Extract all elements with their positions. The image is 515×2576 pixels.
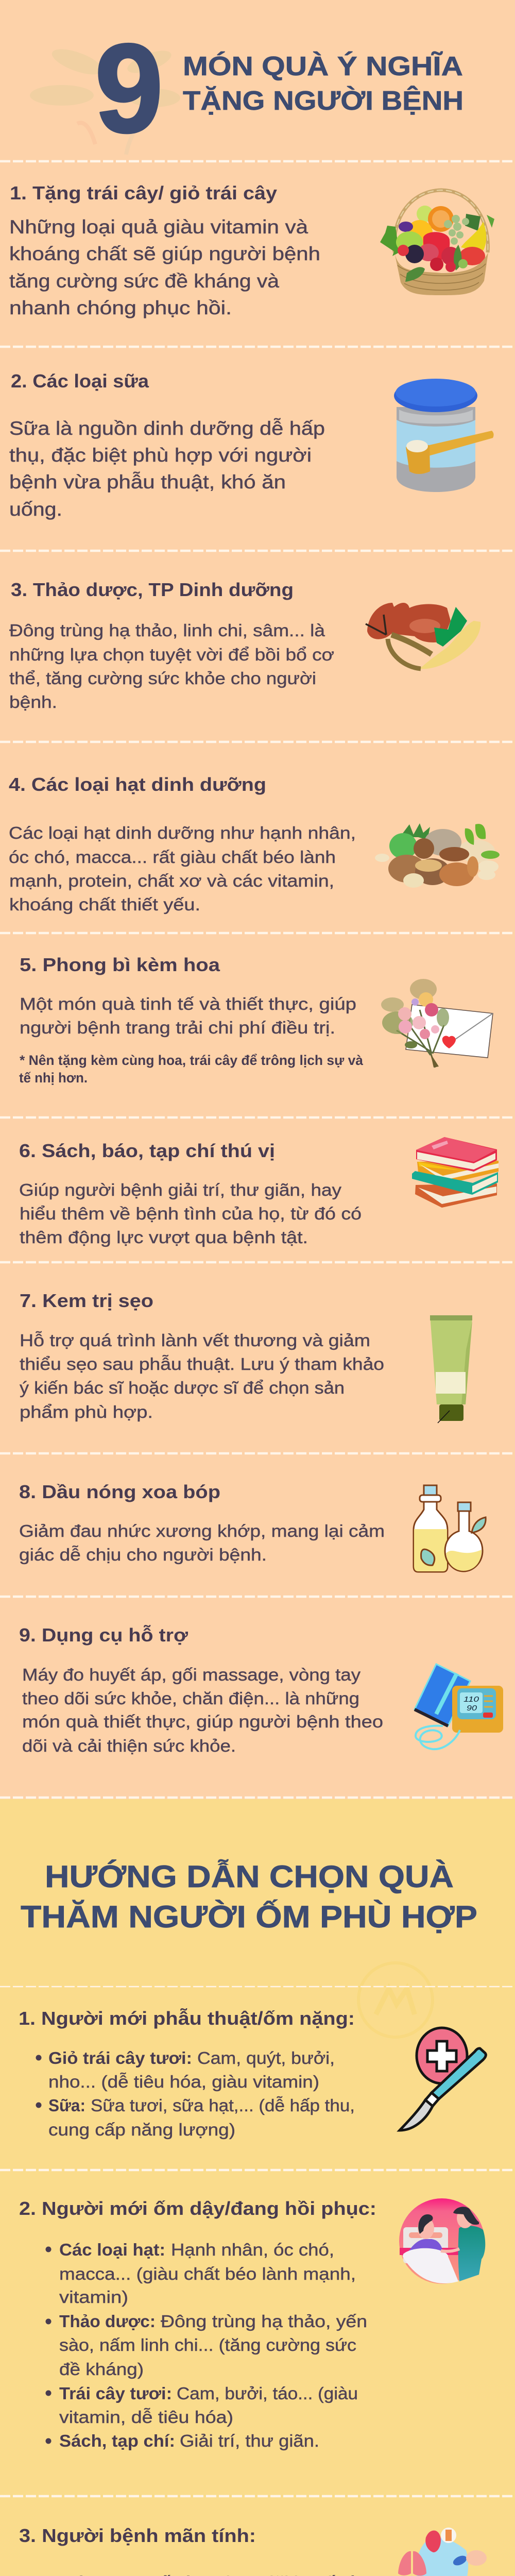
title block bbox=[95, 18, 464, 159]
list guide 2: Cam, bưởi, táo... (giàu bbox=[177, 2384, 358, 2403]
heading 5: 5. Phong bì kèm hoa bbox=[20, 954, 220, 975]
body 4: khoáng chất thiết yếu. bbox=[9, 895, 200, 914]
section title: guide bbox=[21, 1859, 477, 1934]
panel: guide 3 chronic bbox=[19, 2525, 487, 2576]
body 9: theo dõi sức khỏe, chăn điện... là những bbox=[22, 1689, 359, 1708]
icon: cream tube bbox=[430, 1315, 472, 1423]
body 3 bbox=[9, 621, 334, 711]
panel: item 9 support devices bbox=[19, 1624, 503, 1755]
body 6: thêm động lực vượt qua bệnh tật. bbox=[20, 1228, 308, 1247]
body 2 bbox=[9, 418, 325, 520]
body 1 bbox=[9, 216, 320, 318]
body 4: Các loại hạt dinh dưỡng như hạnh nhân, bbox=[9, 823, 356, 842]
panel: item 3 herbs bbox=[9, 579, 480, 711]
body 7 bbox=[20, 1331, 384, 1421]
body 3: Đông trùng hạ thảo, linh chi, sâm... là bbox=[9, 621, 325, 640]
list guide 1: Sữa: bbox=[48, 2096, 85, 2115]
list guide 2: đề kháng) bbox=[59, 2360, 144, 2379]
heading 2: 2. Các loại sữa bbox=[11, 370, 149, 392]
body 6: hiểu thêm về bệnh tình của họ, từ đó có bbox=[20, 1204, 362, 1223]
body 9 bbox=[22, 1665, 383, 1755]
list guide 2: macca... (giàu chất béo lành mạnh, bbox=[59, 2264, 356, 2283]
list guide 2: Trái cây tươi: bbox=[59, 2384, 172, 2403]
panel: item 1 fruit basket bbox=[9, 182, 494, 318]
heading 3: 3. Thảo dược, TP Dinh dưỡng bbox=[11, 579, 294, 600]
note: * Nên tặng kèm cùng hoa, trái cây để trông lịch sự và bbox=[20, 1053, 364, 1068]
heading 7: 7. Kem trị sẹo bbox=[20, 1290, 153, 1311]
icon: oil bottles bbox=[414, 1485, 486, 1572]
body 7: thiểu sẹo sau phẫu thuật. Lưu ý tham khảo bbox=[20, 1354, 384, 1374]
list guide 2: Thảo dược: bbox=[59, 2312, 156, 2331]
list guide 2: vitamin) bbox=[59, 2287, 128, 2307]
big number 9: 9 bbox=[95, 18, 163, 159]
icon: reishi, cordyceps, ginseng bbox=[366, 603, 480, 669]
panel: guide 1 post-surgery bbox=[19, 2008, 486, 2139]
note bbox=[19, 1053, 364, 1086]
panel: guide 2 recovering bbox=[19, 2198, 485, 2450]
body 4: mạnh, protein, chất xơ và các vitamin, bbox=[9, 871, 334, 890]
title watermark bbox=[30, 44, 180, 155]
body 1: Những loại quả giàu vitamin và bbox=[9, 216, 308, 238]
body 1: nhanh chóng phục hồi. bbox=[9, 297, 232, 318]
list guide 2: Hạnh nhân, óc chó, bbox=[171, 2240, 334, 2259]
list guide 1: Cam, quýt, bưởi, bbox=[197, 2048, 335, 2067]
icon: book stack bbox=[412, 1137, 499, 1208]
icon: fruit basket bbox=[380, 190, 494, 295]
body 3: bệnh. bbox=[9, 692, 57, 711]
body 5 bbox=[20, 994, 356, 1037]
list guide 1 bbox=[36, 2048, 355, 2139]
body 7: phẩm phù hợp. bbox=[20, 1402, 153, 1421]
panel: item 7 scar cream bbox=[20, 1290, 472, 1423]
body 6: Giúp người bệnh giải trí, thư giãn, hay bbox=[19, 1180, 342, 1199]
panel: item 2 milk bbox=[9, 370, 494, 520]
body 9: Máy đo huyết áp, gối massage, vòng tay bbox=[22, 1665, 361, 1684]
title text bbox=[183, 51, 464, 116]
heading guide 3: 3. Người bệnh mãn tính: bbox=[19, 2525, 256, 2546]
body 4: óc chó, macca... rất giàu chất béo lành bbox=[9, 848, 336, 867]
list guide 3 bbox=[45, 2573, 367, 2576]
list guide 1: nho... (dễ tiêu hóa, giàu vitamin) bbox=[48, 2072, 319, 2091]
background: yellow section bbox=[0, 1799, 515, 2576]
body 2: uống. bbox=[9, 499, 62, 520]
list guide 2: Sách, tạp chí: bbox=[59, 2431, 175, 2450]
body 5: người bệnh trang trải chi phí điều trị. bbox=[20, 1018, 335, 1037]
icon: milk can bbox=[394, 379, 494, 492]
icon: patient visit bbox=[399, 2198, 485, 2284]
body 1: tăng cường sức đề kháng và bbox=[9, 270, 279, 292]
icon: envelope with bouquet bbox=[381, 979, 493, 1067]
list guide 2: sào, nấm linh chi... (tăng cường sức bbox=[59, 2335, 356, 2354]
panel: item 6 books bbox=[19, 1137, 499, 1247]
list guide 2: Các loại hạt: bbox=[59, 2240, 165, 2259]
yellow section watermark bbox=[358, 1963, 433, 2037]
body 5: Một món quà tinh tế và thiết thực, giúp bbox=[20, 994, 356, 1013]
heading 1: 1. Tặng trái cây/ giỏ trái cây bbox=[10, 182, 277, 204]
body 4 bbox=[9, 823, 356, 914]
body 2: bệnh vừa phẫu thuật, khó ăn bbox=[9, 471, 286, 493]
body 1: khoáng chất sẽ giúp người bệnh bbox=[9, 243, 320, 264]
body 3: thể, tăng cường sức khỏe cho người bbox=[9, 669, 316, 688]
heading 8: 8. Dầu nóng xoa bóp bbox=[19, 1481, 220, 1502]
list guide 2: Giải trí, thư giãn. bbox=[180, 2431, 319, 2450]
list guide 1: Giỏ trái cây tươi: bbox=[48, 2048, 192, 2067]
heading 6: 6. Sách, báo, tạp chí thú vị bbox=[19, 1140, 275, 1161]
icon: scalpel and medical cross bbox=[400, 2028, 486, 2130]
title text: MÓN QUÀ Ý NGHĨA bbox=[183, 51, 463, 81]
heading guide 1: 1. Người mới phẫu thuật/ốm nặng: bbox=[19, 2008, 355, 2029]
heading 9: 9. Dụng cụ hỗ trợ bbox=[19, 1624, 188, 1646]
panel: item 8 massage oil bbox=[19, 1481, 486, 1572]
list guide 1: cung cấp năng lượng) bbox=[48, 2120, 235, 2139]
panel: item 4 nuts bbox=[9, 774, 500, 914]
body 8: giác dễ chịu cho người bệnh. bbox=[19, 1545, 267, 1564]
icon: nuts bbox=[375, 823, 500, 888]
heading guide 2: 2. Người mới ốm dậy/đang hồi phục: bbox=[19, 2198, 376, 2219]
body 9: dõi và cải thiện sức khỏe. bbox=[22, 1736, 236, 1755]
list guide 1: Sữa tươi, sữa hạt,... (dễ hấp thu, bbox=[91, 2096, 355, 2115]
icon: organs and health devices bbox=[398, 2528, 487, 2576]
body 8: Giảm đau nhức xương khớp, mang lại cảm bbox=[19, 1521, 385, 1540]
background: peach section bbox=[0, 0, 515, 1799]
note: tế nhị hơn. bbox=[19, 1070, 88, 1086]
title text: TẶNG NGƯỜI BỆNH bbox=[183, 86, 464, 116]
body 2: Sữa là nguồn dinh dưỡng dễ hấp bbox=[9, 418, 325, 439]
heading 4: 4. Các loại hạt dinh dưỡng bbox=[9, 774, 266, 795]
list guide 2: vitamin, dễ tiêu hóa) bbox=[59, 2408, 233, 2427]
body 6 bbox=[19, 1180, 362, 1247]
body 3: những lựa chọn tuyệt vời để bồi bổ cơ bbox=[9, 645, 334, 664]
section title: guide: HƯỚNG DẪN CHỌN QUÀ bbox=[45, 1859, 454, 1894]
body 8 bbox=[19, 1521, 385, 1564]
list guide 2: Đông trùng hạ thảo, yến bbox=[161, 2312, 367, 2331]
icon: blood pressure monitor bbox=[415, 1664, 503, 1749]
body 2: thụ, đặc biệt phù hợp với người bbox=[9, 445, 312, 466]
icon: blood pressure monitor: 110 bbox=[464, 1695, 479, 1704]
section title: guide: THĂM NGƯỜI ỐM PHÙ HỢP bbox=[21, 1900, 477, 1934]
body 9: món quà thiết thực, giúp người bệnh theo bbox=[22, 1712, 383, 1731]
panel: item 5 envelope and flowers bbox=[19, 954, 493, 1086]
icon: blood pressure monitor: 90 bbox=[467, 1704, 477, 1713]
body 7: Hỗ trợ quá trình lành vết thương và giảm bbox=[20, 1331, 370, 1350]
list guide 2 bbox=[45, 2240, 367, 2450]
body 7: ý kiến bác sĩ hoặc dược sĩ để chọn sản bbox=[20, 1378, 345, 1397]
